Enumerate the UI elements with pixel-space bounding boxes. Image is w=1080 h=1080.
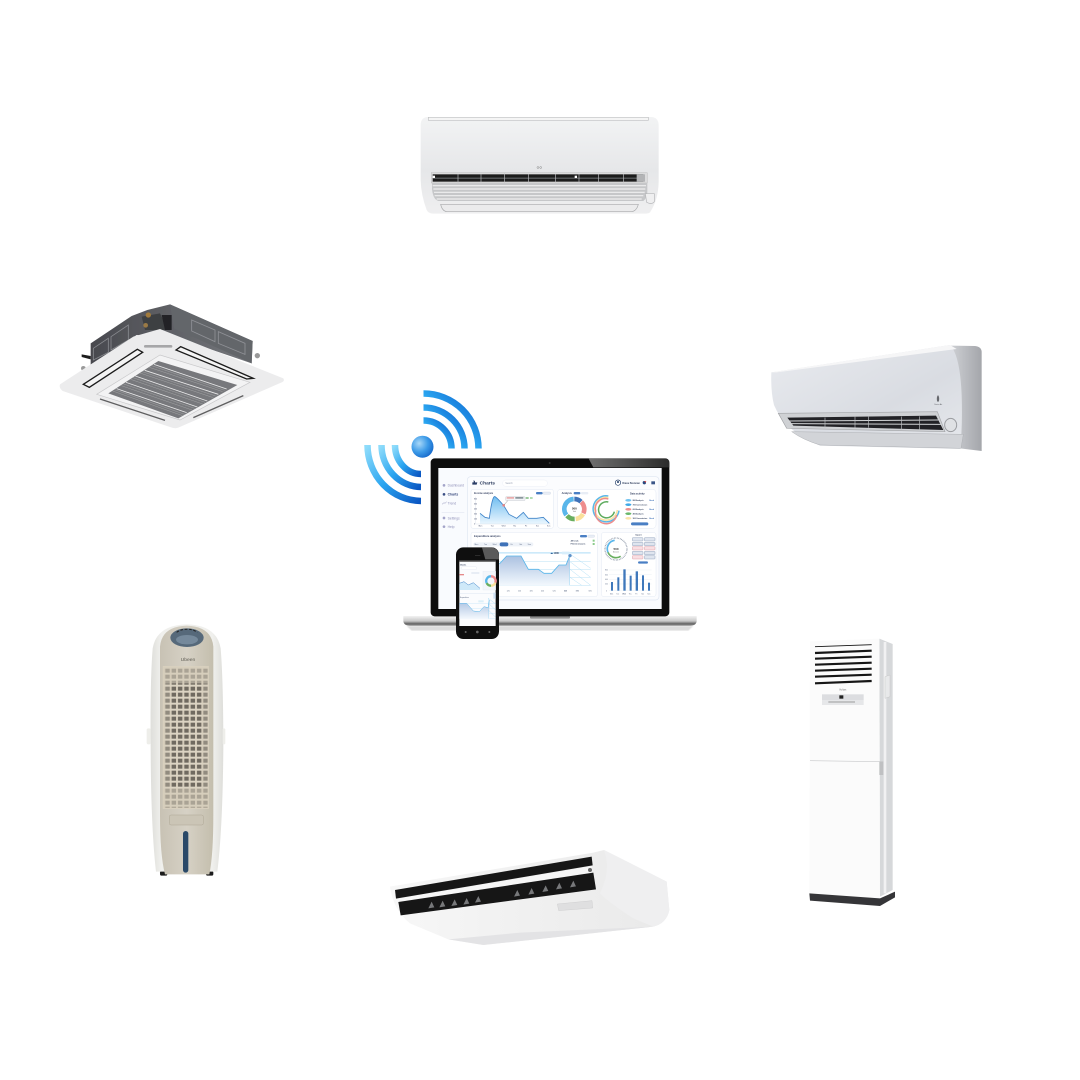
dashboard sidebar [442, 484, 464, 529]
legend: 750 Commission [633, 504, 647, 506]
louvers [432, 183, 654, 212]
outer shell [151, 624, 223, 872]
card: expenditure analysis: 520 [553, 591, 556, 593]
legend: Bond [649, 509, 654, 511]
handle recess [169, 815, 203, 825]
side panel [879, 639, 893, 897]
plinth base [809, 892, 895, 906]
card: radial and bars: Sat [641, 592, 644, 595]
card: income analysis: Sun [547, 525, 550, 527]
card: expenditure analysis: All funds [571, 539, 578, 542]
card: radial and bars: 0 [606, 590, 607, 592]
card: income analysis: 800 [474, 498, 477, 500]
card: expenditure analysis: 1000 [554, 553, 560, 555]
body [390, 850, 669, 945]
front panel [809, 639, 880, 898]
legend: 880 Analysis [633, 499, 644, 502]
card: income analysis: Tue [491, 525, 494, 527]
card: expenditure analysis: 820 [589, 591, 592, 593]
water gauge [183, 831, 188, 873]
card: income analysis: Fri [525, 525, 528, 527]
card: expenditure analysis: Fri [511, 544, 513, 546]
display panel [822, 688, 864, 705]
round sensor [945, 418, 957, 432]
legend: 600 Analysis [633, 508, 644, 511]
brand mark [934, 395, 943, 406]
dashboard header [472, 480, 655, 487]
dashboard screen [438, 468, 662, 609]
phone screen content: Charts [460, 563, 467, 566]
front body [160, 626, 213, 874]
card: income analysis: Wed [502, 525, 505, 527]
card: radial and bars: Fri [635, 593, 638, 595]
phone screen content [459, 560, 496, 619]
card: expenditure analysis: Tue [484, 544, 487, 546]
legend: Bond [649, 500, 654, 502]
legend: 300 Commission [633, 518, 647, 520]
radial gauge [605, 538, 627, 560]
icon: wifi signal [368, 394, 478, 501]
card: income analysis: 400 [474, 508, 477, 510]
card: expenditure analysis: 420 [541, 591, 544, 593]
card: analysis: Total [573, 510, 577, 513]
card: radial and bars: Mon [610, 593, 613, 595]
card: radial and bars: Thu [629, 593, 632, 595]
device: wall-mounted AC top [421, 117, 659, 214]
legend [625, 499, 654, 525]
card: income analysis: Thu [513, 525, 516, 527]
device: floor-standing AC [809, 639, 895, 906]
card: radial and bars: Import [635, 534, 642, 537]
device: ceiling-suspended AC [390, 850, 669, 945]
side end cap [950, 346, 982, 451]
card: expenditure analysis: 120 [507, 591, 510, 593]
card: expenditure analysis: Expenditure analysis [474, 534, 501, 538]
phone screen content: Expenditure [460, 596, 469, 599]
card: analysis [557, 489, 656, 528]
bar chart [611, 569, 650, 591]
dashboard sidebar: Settings [448, 516, 460, 520]
panel [60, 329, 284, 428]
vent slats [815, 645, 872, 683]
display panel: Voltas [839, 688, 847, 692]
device: tower air cooler [147, 624, 225, 876]
laptop screen frame [431, 458, 669, 616]
card: income analysis: Sat [536, 524, 539, 527]
brand logo: ⵔⵔ [537, 165, 542, 169]
card: analysis: 500 [572, 507, 577, 511]
dashboard sidebar: Charts [448, 493, 458, 497]
concentric arcs chart [593, 496, 619, 524]
fan grille [163, 667, 209, 808]
dashboard sidebar: Trend [448, 501, 456, 505]
brand mark: Swiss Air [934, 403, 943, 406]
card: radial and bars: Sun [647, 593, 650, 595]
dashboard sidebar: Dashboard [448, 484, 464, 488]
card: radial and bars: 500 [614, 547, 619, 551]
card: expenditure analysis: Mon [475, 544, 478, 546]
device: ceiling cassette AC [60, 304, 284, 428]
card: income analysis: Mon [479, 525, 482, 527]
card: expenditure analysis: Filtered amounts [571, 543, 585, 546]
control panel [170, 628, 204, 647]
air outlet [431, 173, 647, 183]
card: radial and bars: 800 [605, 570, 608, 572]
card: income analysis: 0 [474, 524, 475, 526]
unit front [771, 345, 962, 449]
card: expenditure analysis [471, 532, 597, 597]
card: radial and bars: Wed [622, 593, 626, 595]
card: radial and bars: 200 [605, 584, 608, 586]
card: expenditure analysis: 320 [530, 591, 533, 593]
air outlet [778, 412, 945, 432]
tag grid [632, 538, 655, 559]
lower louver [792, 432, 963, 448]
card: expenditure analysis: Sun [528, 544, 531, 546]
card: income analysis: Income analysis [474, 492, 494, 495]
card: radial and bars: 600 [605, 574, 608, 576]
device: wall-mounted AC right [771, 345, 982, 451]
device: laptop with dashboard [403, 458, 697, 639]
card: radial and bars: 400 [605, 579, 608, 581]
grille [108, 361, 237, 418]
housing box [81, 304, 260, 371]
top vent [428, 117, 648, 120]
card: expenditure analysis: 620 [564, 591, 567, 593]
lower air slot [398, 868, 596, 915]
dashboard sidebar: Help [448, 525, 455, 529]
card: radial and bars: Tue [616, 593, 619, 595]
inner panel [97, 355, 250, 420]
card: analysis: Analysis [562, 492, 573, 495]
card: income analysis: 300 [474, 513, 477, 515]
card: income analysis [471, 489, 553, 528]
upper air slot [395, 857, 593, 899]
card: income analysis: 600 [474, 503, 477, 505]
card: expenditure analysis: 720 [576, 591, 579, 593]
laptop base [403, 616, 697, 631]
dashboard header: Diane Brennan [622, 482, 640, 485]
donut chart [564, 499, 584, 519]
legend: Bond [649, 518, 654, 520]
card: radial and bars [601, 532, 656, 597]
dashboard header: Charts [480, 481, 495, 487]
card: expenditure analysis: Wed [493, 544, 496, 546]
card: income analysis: 200 [474, 518, 477, 520]
display [557, 901, 593, 911]
wheels [160, 871, 213, 876]
air slots [83, 347, 253, 420]
device: smartphone [456, 547, 499, 639]
legend: 450 Analysis [633, 512, 644, 515]
dashboard header: Search [505, 482, 513, 485]
card: analysis: Data activity [630, 492, 645, 495]
card: radial and bars: Amount [613, 550, 619, 553]
unit body [421, 117, 659, 214]
card: expenditure analysis: 220 [518, 591, 521, 593]
brand: Ubeen [181, 657, 196, 663]
card: expenditure analysis: Sat [519, 543, 523, 546]
